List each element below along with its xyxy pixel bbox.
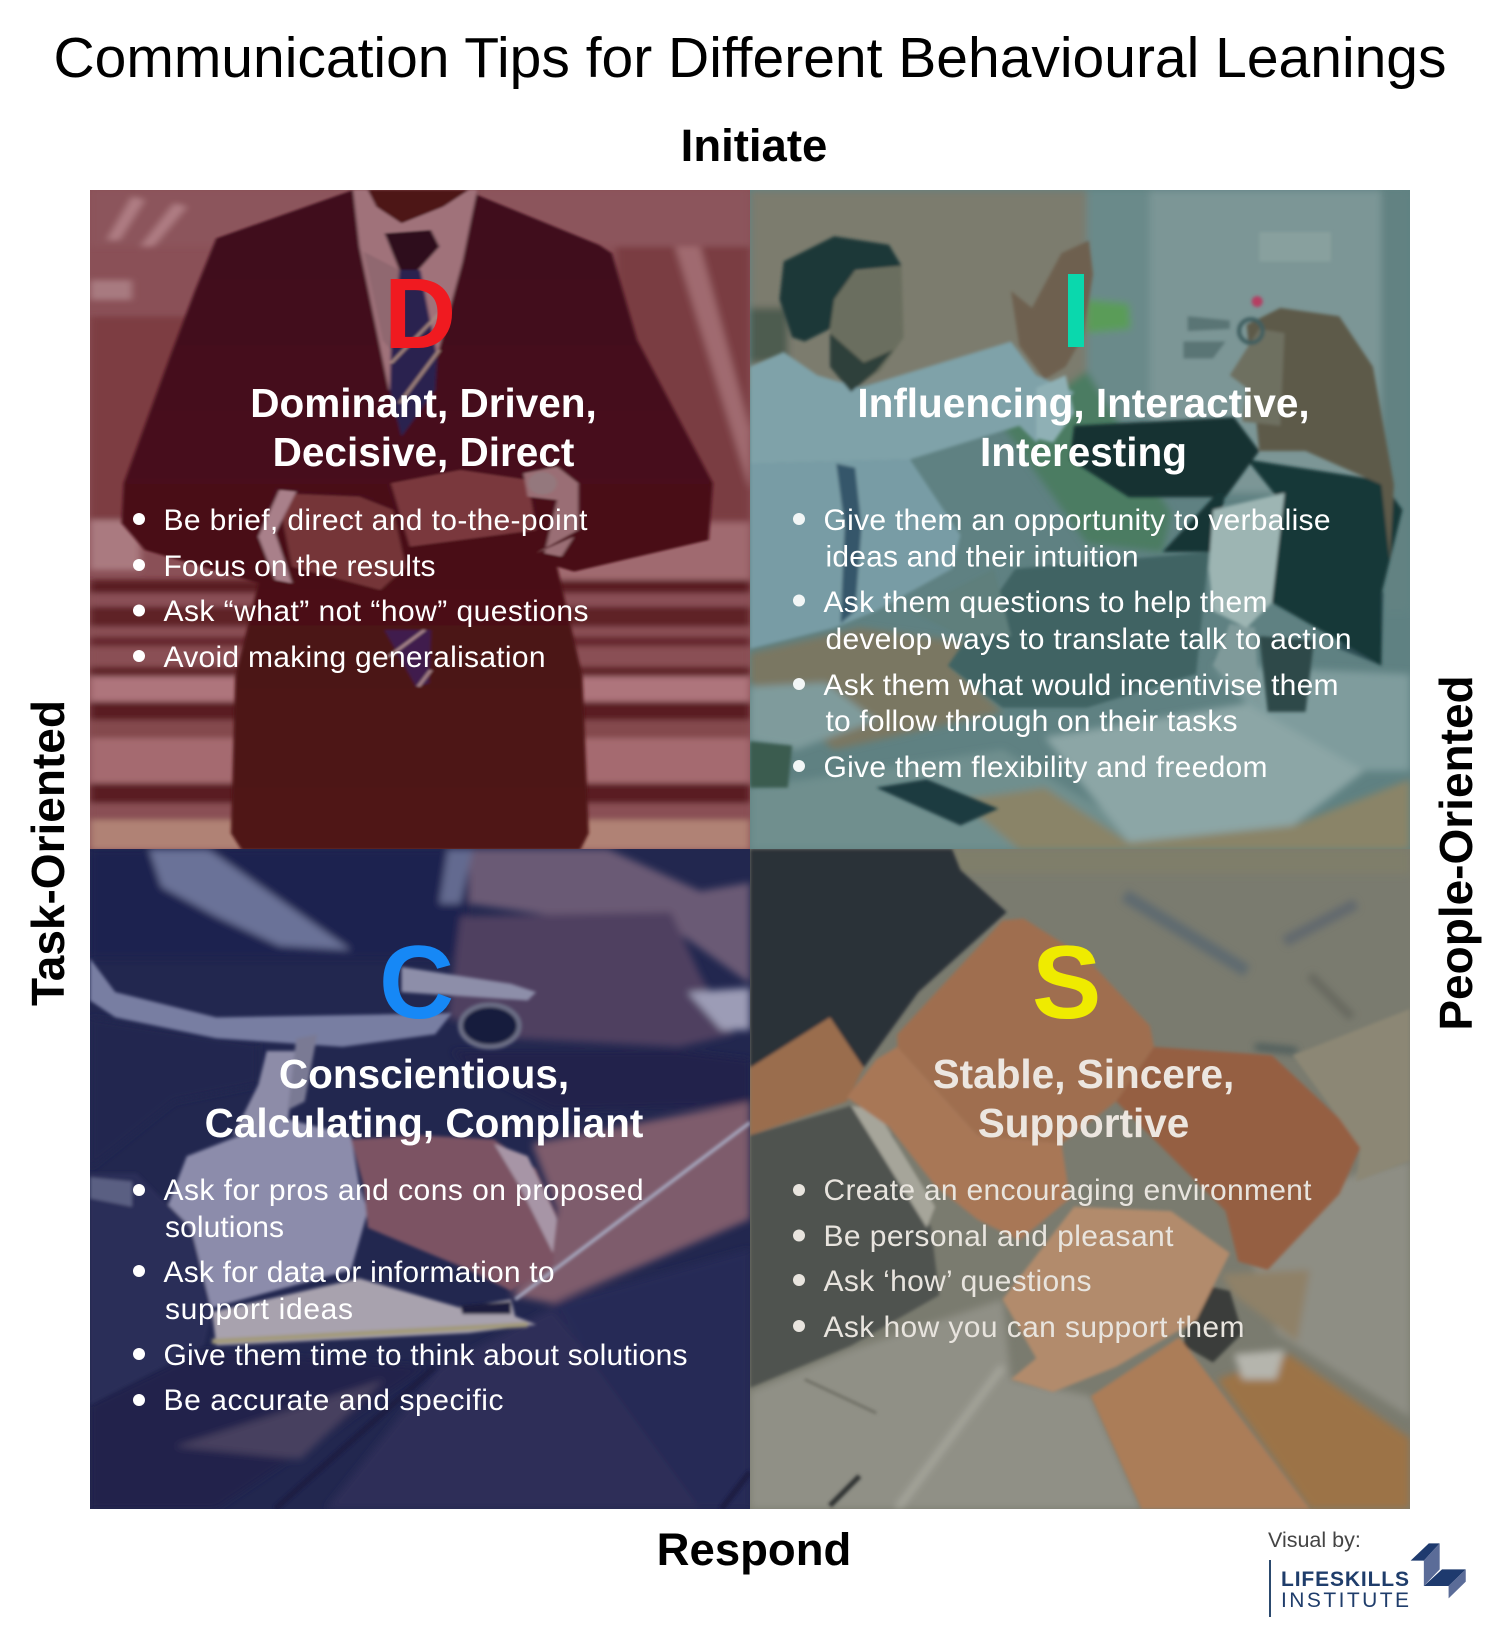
bullet list C: Be accurate and specific — [164, 1384, 504, 1417]
heading C: Conscientious, — [279, 1051, 569, 1097]
bullet list D: Avoid making generalisation — [164, 641, 546, 674]
axis label: Initiate: Initiate — [681, 120, 827, 171]
heading I — [857, 380, 1310, 475]
letter D: D — [384, 258, 456, 370]
bullet list S: Ask ‘how’ questions — [824, 1265, 1092, 1298]
axis label: Task-Oriented: Task-Oriented — [22, 700, 74, 1006]
photo: writing hand with navy tint — [90, 849, 750, 1509]
logo: Lifeskills Institute — [1269, 1543, 1466, 1617]
bullet list I: Give them flexibility and freedom — [824, 751, 1268, 784]
bullet list D: Be brief, direct and to-the-point — [164, 504, 588, 537]
heading D — [250, 380, 597, 475]
axis label: People-Oriented: People-Oriented — [1430, 675, 1482, 1031]
heading S: Stable, Sincere, — [933, 1051, 1234, 1097]
bullet list I: to follow through on their tasks — [826, 705, 1238, 738]
bullet list I: develop ways to translate talk to action — [826, 623, 1352, 656]
panel: S quadrant — [750, 849, 1410, 1509]
bullet list I: Ask them questions to help them — [824, 586, 1268, 619]
bullet list C: support ideas — [165, 1293, 353, 1326]
panel: D quadrant — [90, 190, 750, 850]
photo: joined hands with olive tint — [750, 849, 1410, 1509]
bullet list D: Focus on the results — [164, 550, 436, 583]
bullet list S: Create an encouraging environment — [824, 1174, 1312, 1207]
bullet list C: Give them time to think about solutions — [164, 1339, 688, 1372]
bullet list D — [133, 504, 588, 674]
credit: Visual by: Visual by: — [1268, 1528, 1361, 1552]
photo: man in suit with red tint — [90, 190, 750, 850]
heading I: Interesting — [980, 429, 1187, 475]
heading C — [205, 1051, 643, 1146]
bullet list I: ideas and their intuition — [826, 540, 1138, 574]
bullet list D: Ask “what” not “how” questions — [164, 595, 588, 628]
title: Communication Tips for Different Behavioural Leanings — [53, 26, 1447, 90]
heading D: Dominant, Driven, — [250, 380, 597, 426]
logo: Lifeskills Institute: LIFESKILLS — [1281, 1568, 1409, 1591]
bullet list S: Ask how you can support them — [824, 1311, 1244, 1344]
heading S — [933, 1051, 1234, 1146]
heading I: Influencing, Interactive, — [857, 380, 1310, 426]
letter C: C — [379, 925, 454, 1041]
letter S: S — [1032, 925, 1101, 1041]
bullet list C — [133, 1174, 688, 1417]
heading C: Calculating, Compliant — [205, 1100, 643, 1146]
bullet list C: Ask for pros and cons on proposed — [164, 1174, 644, 1207]
logo: Lifeskills Institute: INSTITUTE — [1281, 1589, 1409, 1612]
bullet list S — [793, 1174, 1312, 1344]
bullet list I — [793, 504, 1352, 784]
panel: C quadrant — [90, 849, 750, 1509]
bullet list C: solutions — [165, 1211, 284, 1244]
bullet list I: Ask them what would incentivise them — [824, 669, 1338, 702]
bullet list I: Give them an opportunity to verbalise — [824, 504, 1330, 537]
heading S: Supportive — [978, 1100, 1189, 1146]
heading D: Decisive, Direct — [273, 429, 574, 475]
axis label: Respond: Respond — [657, 1524, 851, 1575]
panel: I quadrant — [750, 190, 1410, 850]
bullet list C: Ask for data or information to — [164, 1256, 554, 1289]
photo: high-five with teal tint — [750, 190, 1410, 850]
letter I — [1068, 274, 1084, 347]
bullet list S: Be personal and pleasant — [824, 1220, 1174, 1253]
